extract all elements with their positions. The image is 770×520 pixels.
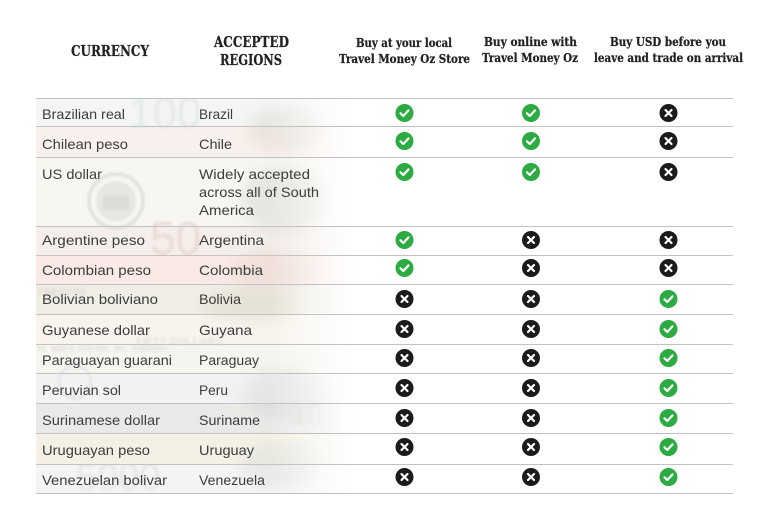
row: Chilean peso: Chilean peso [42,136,128,152]
faded banknote background: 50 [150,212,201,264]
row: US dollar: US dollar [42,166,102,182]
row: Venezuelan bolivar: Venezuela [199,472,265,488]
row: Argentine peso: Argentina [199,232,264,248]
column heading: buy USD [594,34,743,65]
row: Paraguayan guarani: Paraguay [199,352,259,368]
row: Chilean peso [42,132,678,152]
row: Brazilian real: Brazilian real [42,106,125,122]
faded banknote background: FIFTY DOLLARS [136,336,223,348]
row: US dollar: America [199,202,254,218]
row: Peruvian sol [42,379,678,398]
column heading: local store: Buy at your local [356,35,452,50]
row: Surinamese dollar: Suriname [199,412,260,428]
row: Venezuelan bolivar [42,468,678,488]
row: Bolivian boliviano [42,290,678,308]
faded banknote background: 10 [290,399,323,432]
row: Uruguayan peso [42,438,678,458]
column heading: local store [339,35,470,66]
column heading: accepted regions [213,33,289,69]
row: US dollar: Widely accepted [199,166,310,182]
column heading: currency: CURRENCY [71,42,149,60]
row: Uruguayan peso: Uruguay [199,442,254,458]
column heading: buy USD: Buy USD before you [610,34,726,49]
row: Brazilian real: Brazil [199,106,233,122]
faded banknote background: 7969270 [36,286,86,300]
row: Colombian peso: Colombian peso [42,262,151,278]
column heading: buy USD: leave and trade on arrival [594,50,743,65]
row: Bolivian boliviano: Bolivian boliviano [42,291,158,307]
row: US dollar [42,163,678,218]
column heading: accepted regions: ACCEPTED [213,33,289,51]
column heading: online: Buy online with [484,34,577,49]
row: Peruvian sol: Peru [199,382,228,398]
row: US dollar: across all of South [199,184,319,200]
column heading: online [482,34,578,65]
row: Surinamese dollar: Surinamese dollar [42,412,160,428]
row: Peruvian sol: Peruvian sol [42,382,121,398]
row: Paraguayan guarani: Paraguayan guarani [42,352,172,368]
row: Paraguayan guarani [42,349,678,368]
row: Colombian peso [42,259,678,278]
row: Uruguayan peso: Uruguayan peso [42,442,150,458]
column heading: accepted regions: REGIONS [220,51,282,69]
row: Argentine peso [42,231,678,249]
column heading: online: Travel Money Oz [482,50,578,65]
column heading: local store: Travel Money Oz Store [339,51,470,66]
faded banknote background [36,99,330,493]
faded banknote background: 100 [128,89,201,138]
row: Brazilian real [42,104,678,122]
row: Surinamese dollar [42,409,678,428]
row: Argentine peso: Argentine peso [42,232,145,248]
row: Venezuelan bolivar: Venezuelan bolivar [42,472,167,488]
row: Bolivian boliviano: Bolivia [199,291,241,307]
row: Colombian peso: Colombia [199,262,263,278]
row: Guyanese dollar: Guyana [199,322,252,338]
faded banknote background: EL BANCO CENTRAL DEL PARAGUAY [38,346,169,354]
row: Guyanese dollar [42,320,678,338]
row: Guyanese dollar: Guyanese dollar [42,322,150,338]
faded banknote background: 5000 [76,457,161,499]
row: Chilean peso: Chile [199,136,232,152]
